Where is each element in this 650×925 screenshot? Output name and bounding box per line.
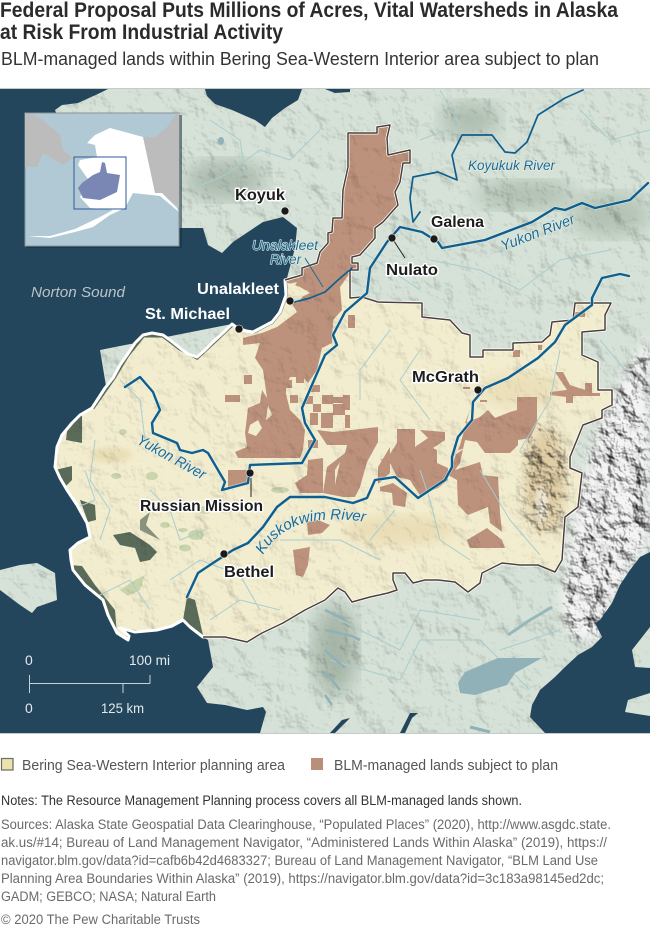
label: Unalakleet River: Unalakleet [252,237,319,253]
river: Kuskokwim [187,274,629,597]
label: Russian Mission: Russian Mission [140,498,263,515]
label: Koyukuk River: Koyukuk River [468,157,556,173]
label: Unalakleet: Unalakleet [197,281,280,298]
inset: Alaska [28,128,179,238]
tidal flats [55,280,286,640]
label: Norton Sound: Norton Sound [31,284,126,301]
inset: Russia [25,113,73,167]
scale bar: 0 [25,652,33,668]
label: Unalakleet River [252,239,319,265]
label: Koyuk: Koyuk [235,187,285,204]
relief over planning area [57,128,607,640]
sources: ak.us/#14; Bureau of Land Management Navigator, “Administered Lands Within Alaska” (2019), https:// [1,835,607,850]
sea [0,89,650,733]
sources: Sources: Alaska State Geospatial Data Clearinghouse, “Populated Places” (2020), http://www.asgdc.state. [1,817,611,832]
land outside planning area [0,89,650,733]
scale bar: 125 km [101,700,144,716]
inset: planning area [78,162,120,200]
wetland lakes [111,429,289,596]
tan hills [88,372,565,545]
city dots [220,207,482,558]
label: Nulato: Nulato [386,262,438,279]
BLM-managed lands [225,125,600,577]
mountain range [560,335,650,640]
label: Yukon River north: Yukon River [498,211,578,255]
lakes outside planning area [218,89,552,732]
land relief [0,89,650,733]
title: at Risk From Industrial Activity [0,21,283,44]
inset: Canada [143,113,179,207]
checker patches [225,375,350,448]
inset: extent box [74,157,126,209]
planning area [56,127,610,640]
title [0,0,618,44]
planning area boundary [55,125,612,642]
light gaps in BLM lands [248,282,465,485]
label: Galena: Galena [431,214,484,231]
dark relief patches [185,102,650,695]
label: Kuskokwim River: Kuskokwim River [255,508,368,555]
label: Yukon River south: Yukon River [134,432,210,484]
river: Unalakleet [295,268,352,302]
label: St. Michael: St. Michael [145,306,230,323]
label: McGrath: McGrath [412,369,479,386]
notes: Notes: The Resource Management Planning process covers all BLM-managed lands shown. [1,793,522,808]
scale bar: 100 mi [129,652,170,668]
inset locator map [25,113,182,248]
sources [1,817,611,904]
mountain relief [554,340,650,648]
sources: GADM; GEBCO; NASA; Natural Earth [1,889,216,904]
sources: navigator.blm.gov/data?id=cafb6b42d4683327; Bureau of Land Management Navigator, “BLM Land Use [1,853,598,868]
faint rivers north [190,90,650,690]
sources: Planning Area Boundaries Within Alaska” (2019), https://navigator.blm.gov/data?id=3c183a98145ed2dc; [1,871,604,886]
subtitle: BLM-managed lands within Bering Sea-Western Interior area subject to plan [1,48,599,69]
river: Koyukuk [410,90,583,222]
label: Bethel: Bethel [224,564,274,581]
tan hill relief [516,414,574,542]
map frame lines [0,88,650,734]
legend: BLM lands: BLM-managed lands subject to plan [334,757,558,774]
scale bar: 0 [25,700,33,716]
map [0,89,650,733]
scale bar [25,652,170,716]
legend [2,757,558,774]
faint rivers in planning area [70,330,560,620]
river: Yukon [125,183,648,490]
leader lines [251,238,405,497]
label: Unalakleet River: River [270,251,302,267]
legend: planning area: Bering Sea-Western Interior planning area [22,757,286,774]
